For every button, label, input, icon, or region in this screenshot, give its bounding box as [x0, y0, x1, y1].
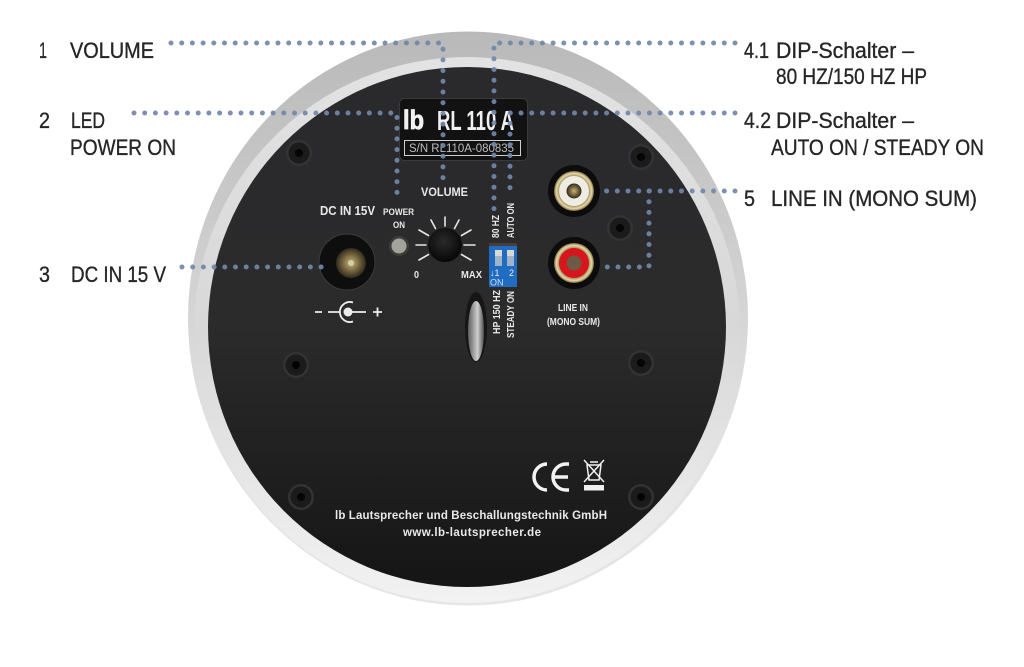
callout 4.1 DIP switch: 80 HZ/150 HZ HP [776, 64, 927, 89]
model name: RL 110 A [437, 105, 514, 136]
DIP switch block: ↓1 [490, 268, 500, 278]
callout 4.2 DIP switch: AUTO ON / STEADY ON [771, 135, 984, 160]
speaker housing [188, 32, 748, 606]
panel label: line in: (MONO SUM) [547, 317, 600, 328]
callout 3 DC in: 3 [39, 262, 50, 287]
serial number box: S/N RL110A-080835 [409, 143, 514, 155]
leader 5: line in [604, 188, 735, 194]
power LED [389, 236, 409, 256]
polarity symbol [315, 302, 382, 322]
callout 4.2 DIP switch [744, 108, 984, 160]
leader 4.2: auto on [510, 113, 735, 198]
model nameplate [400, 98, 528, 160]
icon: crossed-out bin [584, 460, 604, 490]
DC jack socket [319, 234, 375, 290]
panel label: power on: POWER [383, 207, 414, 218]
callout 2 LED power on: POWER ON [70, 135, 176, 160]
DIP switch block: 2 [509, 268, 514, 278]
volume knob with scale: MAX [461, 270, 482, 281]
icon: CE mark [534, 464, 569, 490]
panel label: power on [383, 207, 414, 231]
volume knob with scale: 0 [414, 270, 419, 281]
callout 1 volume: VOLUME [70, 38, 154, 63]
manufacturer text: lb Lautsprecher und Beschallungstechnik GmbH [335, 510, 607, 522]
callout 3 DC in [39, 262, 166, 287]
dotted leader lines [134, 43, 735, 267]
leader 4.1: 80/150 Hz [494, 43, 735, 210]
RCA socket red [548, 237, 600, 289]
panel label: power on: ON [393, 220, 405, 231]
manufacturer text: www.lb-lautsprecher.de [402, 527, 541, 539]
DIP switch labels, bottom: STEADY ON [506, 291, 517, 338]
DIP switch labels, bottom [492, 290, 517, 338]
callout 4.1 DIP switch: 4.1 [744, 38, 769, 63]
callout 4.1 DIP switch: DIP-Schalter – [776, 38, 915, 63]
panel label: line in [547, 303, 600, 328]
DIP switch labels, top: AUTO ON [506, 203, 517, 238]
callout 1 volume: 1 [39, 38, 47, 63]
callout 5 line in: 5 [744, 186, 755, 211]
callout 2 LED power on: 2 [39, 108, 50, 133]
callout 4.1 DIP switch [744, 38, 927, 89]
DIP switch labels, top: 80 HZ [491, 215, 502, 238]
manufacturer text [335, 510, 607, 539]
leader 1: volume [171, 43, 443, 182]
DIP switch labels, bottom: HP 150 HZ [492, 290, 503, 334]
callout 2 LED power on [39, 108, 176, 160]
leader 5: branch to red socket [604, 191, 649, 267]
callout 5 line in: LINE IN (MONO SUM) [771, 186, 977, 211]
callout 2 LED power on: LED [71, 108, 105, 133]
volume knob with scale [414, 217, 482, 281]
suspension eye [465, 292, 487, 362]
DIP switch labels, top [491, 203, 517, 238]
callout 1 volume [39, 38, 154, 63]
panel label: volume: VOLUME [421, 185, 468, 199]
leader 2: LED [134, 113, 397, 201]
callout 4.2 DIP switch: 4.2 [744, 108, 771, 133]
mounting screws [283, 140, 654, 510]
callout 3 DC in: DC IN 15 V [71, 262, 166, 287]
RCA socket white [548, 165, 600, 217]
leader 3: DC in [182, 264, 322, 270]
black back plate [208, 67, 726, 587]
panel label: dc in: DC IN 15V [320, 203, 375, 218]
DIP switch block [489, 243, 517, 288]
callout 4.2 DIP switch: DIP-Schalter – [776, 108, 915, 133]
logo lb: lb [403, 105, 424, 135]
panel label: line in: LINE IN [558, 303, 588, 314]
DIP switch block: ON [490, 278, 504, 288]
